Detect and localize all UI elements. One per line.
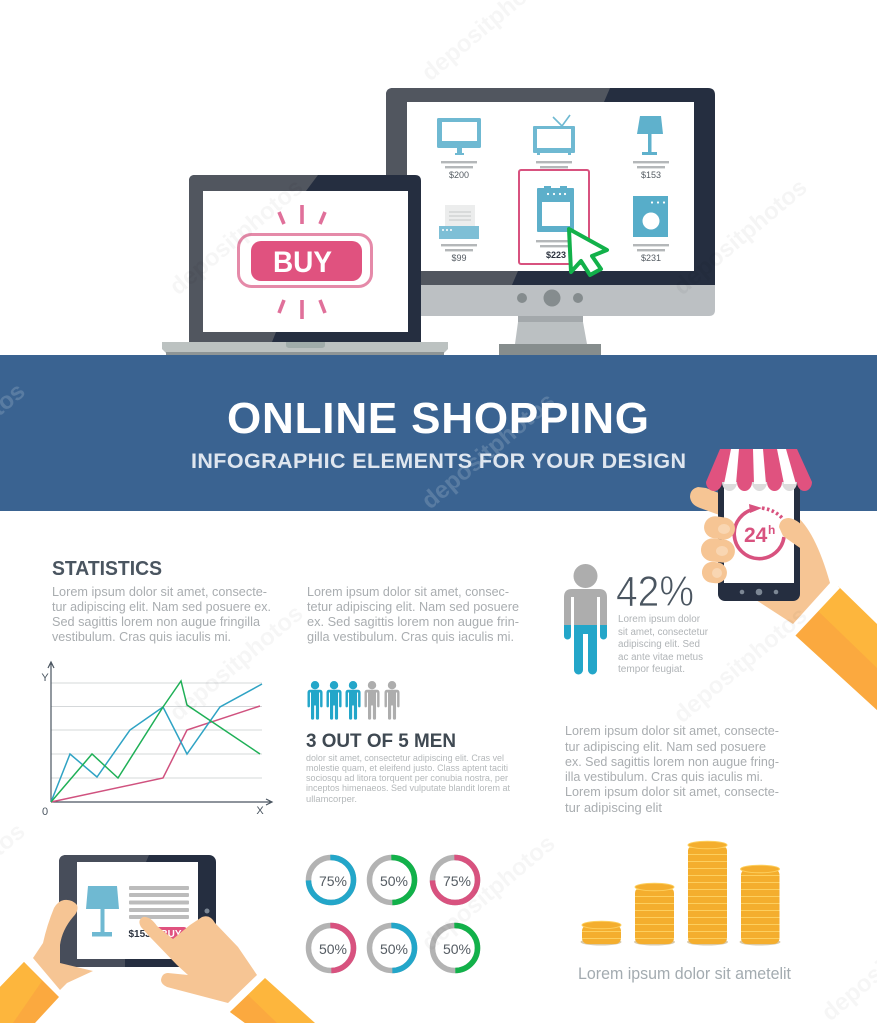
product: oven $223 (536, 186, 574, 260)
shop awning (706, 449, 812, 491)
heading: 3 out of 5 men: 3 OUT OF 5 MEN (306, 731, 456, 752)
product highlight box (519, 170, 589, 264)
text block: right paragraph: illa vestibulum. Cras quis iaculis mi. (565, 770, 763, 784)
watermarks: depositphotos (165, 174, 309, 301)
text block: statistics body (52, 585, 271, 644)
product: washing machine $231 (633, 196, 669, 263)
heading: statistics: STATISTICS (52, 558, 162, 580)
icon: 3 of 5 people row (308, 681, 400, 720)
coin caption: Lorem ipsum dolor sit ametelit (578, 964, 791, 983)
buy button: BUY (160, 929, 182, 940)
donut: 75 percent pink: 75% (443, 873, 471, 889)
text block: 42 percent description: tempor feugiat. (618, 664, 685, 675)
text block: second column: tetur adipiscing elit. Nam sed posuere (307, 600, 519, 614)
product: printer $99 (439, 205, 479, 263)
product: oven $223: $223 (546, 250, 566, 260)
donut charts (308, 858, 478, 970)
watermarks: depositphotos (417, 830, 561, 957)
icon: green cursor arrow (569, 229, 607, 275)
text block: statistics body: Lorem ipsum dolor sit amet, consecte- (52, 585, 267, 599)
text block: men description: molestie quam, et eleifend justo. Class aptent taciti (306, 763, 508, 773)
text block: 42 percent description: ac ante vitae metus (618, 652, 703, 663)
fingers (700, 515, 807, 584)
right sleeve (230, 978, 315, 1023)
coin stacks (580, 841, 780, 946)
text block: men description: dolor sit amet, consectetur adipiscing elit. Cras vel (306, 753, 504, 763)
axis labels: 0 (42, 806, 48, 818)
text block: 42 percent description: sit amet, consectetur (618, 627, 709, 638)
price: $153 (128, 929, 151, 940)
series: green (51, 681, 260, 802)
hand holding phone shop (690, 449, 877, 710)
donut: 75 percent blue (308, 858, 354, 902)
coin stack 1 (580, 921, 622, 946)
icon: 24h clock: 24 (744, 524, 768, 547)
text block: statistics body: tur adipiscing elit. Nam sed posuere ex. (52, 600, 271, 614)
text block: second column: ex. Sed sagittis lorem non augue frin- (307, 615, 519, 629)
tablet screen (77, 862, 198, 959)
text block: right paragraph: tur adipiscing elit. Nam sed posuere (565, 740, 766, 754)
donut: 50 percent pink: 50% (319, 941, 347, 957)
text block: statistics body: Sed sagittis lorem non augue fringilla (52, 615, 260, 629)
icon: lamp (86, 886, 119, 936)
watermarks: depositphotos (417, 388, 561, 515)
text block: right paragraph: Lorem ipsum dolor sit amet, consecte- (565, 785, 779, 799)
phone body (718, 480, 800, 601)
donut: 75 percent pink (432, 858, 478, 902)
text block: second column: Lorem ipsum dolor sit amet, consec- (307, 585, 509, 599)
left hand (33, 900, 93, 990)
text block: right paragraph (565, 724, 779, 815)
line chart (41, 662, 272, 818)
product: washing machine $231: $231 (641, 253, 661, 263)
donut: 50 percent green second: 50% (443, 941, 471, 957)
text block: men description: sociosqu ad litora torquent per conubia nostra, per (306, 773, 508, 783)
stat: 42 percent: 42% (616, 568, 694, 616)
text block: statistics body: vestibulum. Cras quis iaculis mi. (52, 630, 231, 644)
chart axes (48, 662, 272, 805)
text block: second column (307, 585, 519, 644)
text block: men description (306, 753, 510, 804)
laptop frame (189, 175, 421, 342)
palm and index finger (690, 487, 830, 624)
monitor screen (407, 102, 694, 271)
chart grid (51, 683, 262, 778)
donut: 50 percent blue (370, 926, 414, 970)
laptop (162, 175, 448, 355)
donut: 50 percent pink (308, 926, 354, 970)
text block: 42 percent description: Lorem ipsum dolor (618, 614, 701, 625)
title: ONLINE SHOPPING (227, 394, 649, 443)
series: blue (51, 684, 262, 802)
watermarks: depositphotos (669, 602, 813, 729)
watermarks: depositphotos (165, 600, 309, 727)
product: television (533, 115, 575, 168)
coin stack 2 (634, 883, 675, 946)
product: lamp $153: $153 (641, 170, 661, 180)
laptop base (162, 342, 448, 355)
monitor frame (386, 88, 715, 285)
right hand (139, 916, 257, 1003)
axis labels (41, 672, 264, 818)
tablet frame (59, 855, 216, 967)
series: pink (51, 706, 260, 802)
text block: 42 percent description: adipiscing elit. Sed (618, 639, 700, 650)
buy button (156, 927, 187, 940)
text block: right paragraph: ex. Sed sagittis lorem non augue fring- (565, 755, 779, 769)
watermarks: depositphotos (669, 174, 813, 301)
buy button: BUY (273, 246, 332, 279)
product: lamp $153 (633, 116, 669, 180)
product: monitor $200 (437, 118, 481, 180)
buy button (238, 234, 372, 286)
text block: 42 percent description (618, 614, 709, 675)
donut: 50 percent blue: 50% (380, 941, 408, 957)
text block: second column: gilla vestibulum. Cras quis iaculis mi. (307, 630, 514, 644)
icon: buy button rays (279, 205, 325, 319)
axis labels: Y (41, 672, 49, 684)
donut: 50 percent green (370, 858, 414, 902)
coin stack 3 (687, 841, 728, 946)
subtitle: INFOGRAPHIC ELEMENTS FOR YOUR DESIGN (191, 449, 686, 473)
desktop monitor (386, 88, 715, 355)
title banner (0, 355, 877, 511)
product: printer $99: $99 (451, 253, 467, 263)
icon: 24h clock (734, 504, 784, 559)
tablet with hands (0, 855, 315, 1023)
donut: 75 percent blue: 75% (319, 873, 347, 889)
coin stack 4 (740, 865, 780, 946)
donut: 50 percent green second (432, 926, 478, 970)
icon: 24h clock: h (768, 523, 775, 537)
laptop screen (203, 191, 408, 332)
axis labels: X (256, 805, 264, 817)
text block: men description: ullamcorper. (306, 794, 357, 804)
donut: 50 percent green: 50% (380, 873, 408, 889)
sleeve (790, 583, 877, 710)
statistics section (52, 558, 271, 644)
text block: right paragraph: Lorem ipsum dolor sit amet, consecte- (565, 724, 779, 738)
text block: men description: inceptos himenaeos. Sed vulputate blandit lorem at (306, 783, 510, 793)
text block: right paragraph: tur adipiscing elit (565, 801, 663, 815)
monitor chin (386, 280, 715, 316)
product description lines (129, 886, 189, 919)
monitor stand (499, 316, 601, 355)
product: monitor $200: $200 (449, 170, 469, 180)
left sleeve (0, 962, 59, 1023)
icon: person 42 percent (564, 564, 607, 674)
